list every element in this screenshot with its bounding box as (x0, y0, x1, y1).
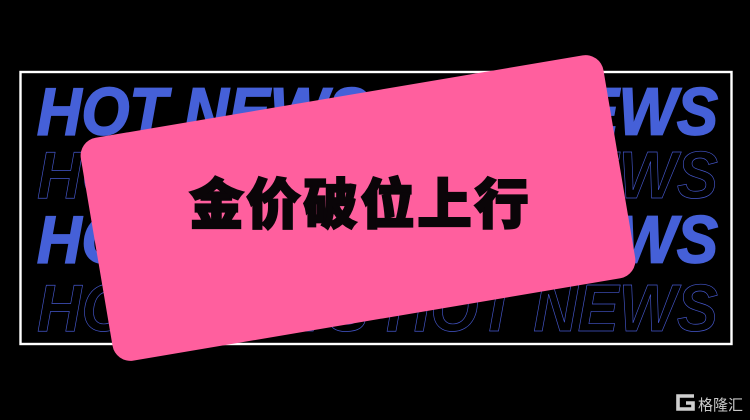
headline: 金价破位上行 (190, 174, 532, 236)
logo mark: G (678, 396, 694, 409)
background text: HOT NEWS rows (37, 74, 718, 346)
white frame (20, 72, 732, 344)
logo text: 格隆汇 (698, 397, 743, 414)
watermark logo (678, 396, 743, 414)
pink card (78, 52, 638, 364)
